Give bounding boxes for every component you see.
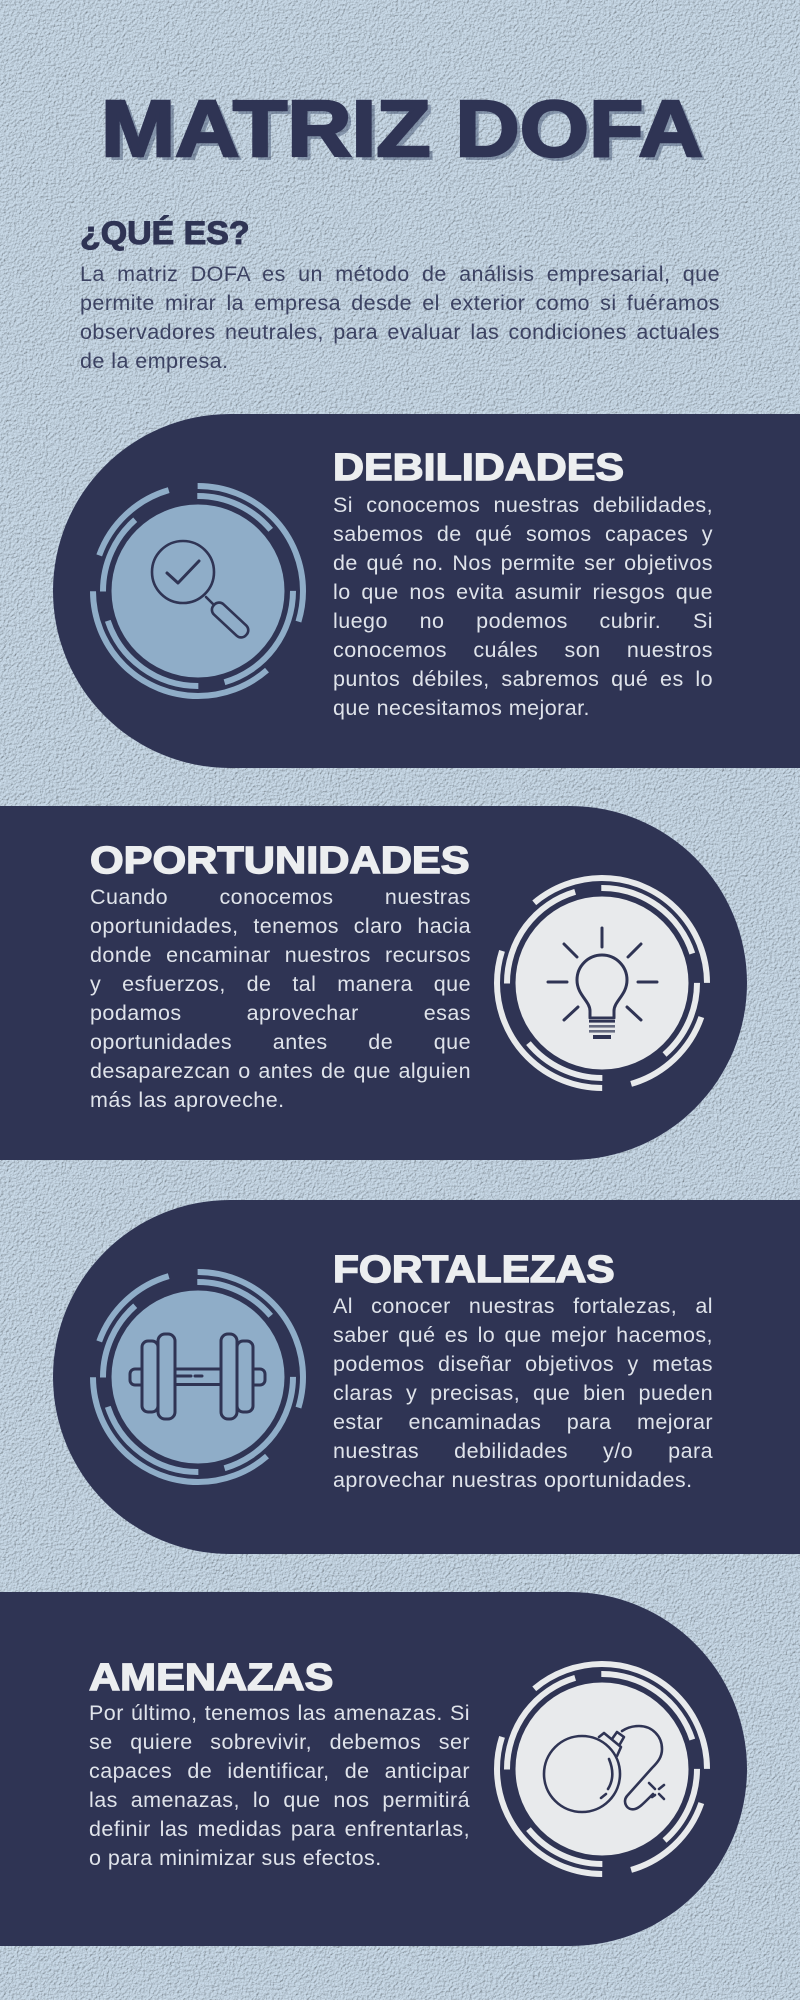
body text: oportunidades: desaparezcan o antes de que alguien xyxy=(90,1059,471,1083)
body text: amenazas: las amenazas, lo que nos permitirá xyxy=(89,1788,470,1812)
body text: debilidades: luego no podemos cubrir. Si xyxy=(333,609,713,633)
heading: fortalezas: FORTALEZAS xyxy=(333,1249,615,1291)
body text: oportunidades: y esfuerzos, de tal manera que xyxy=(90,972,471,996)
body text: debilidades: de qué no. Nos permite ser objetivos xyxy=(333,551,713,575)
title: MATRIZ DOFA xyxy=(101,84,703,173)
body text: amenazas: definir las medidas para enfrentarlas, xyxy=(89,1817,470,1841)
body text: debilidades: lo que nos evita asumir riesgos que xyxy=(333,580,713,604)
body text: oportunidades: oportunidades, tenemos claro hacia xyxy=(90,914,471,938)
intro text: permite mirar la empresa desde el exterior como si fuéramos xyxy=(80,291,720,315)
intro text xyxy=(80,262,720,373)
body text: oportunidades: Cuando conocemos nuestras xyxy=(90,885,471,909)
body text: oportunidades: podamos aprovechar esas xyxy=(90,1001,471,1025)
body text: fortalezas: saber qué es lo que mejor hacemos, xyxy=(333,1323,713,1347)
panel: debilidades xyxy=(53,414,800,768)
body text: oportunidades: más las aproveche. xyxy=(90,1088,285,1112)
body text: oportunidades: oportunidades antes de que xyxy=(90,1030,471,1054)
icon: magnifier with check xyxy=(90,483,306,699)
panel: fortalezas xyxy=(53,1200,800,1554)
body text: amenazas xyxy=(89,1701,470,1870)
icon: bomb xyxy=(494,1661,710,1877)
body text: fortalezas: Al conocer nuestras fortalezas, al xyxy=(333,1294,713,1318)
heading: oportunidades: OPORTUNIDADES xyxy=(90,840,470,882)
panel: oportunidades xyxy=(0,806,747,1160)
body text: amenazas: se quiere sobrevivir, debemos ser xyxy=(89,1730,470,1754)
body text: debilidades: sabemos de qué somos capaces y xyxy=(333,522,713,546)
intro text: observadores neutrales, para evaluar las condiciones actuales xyxy=(80,320,720,344)
panel: amenazas xyxy=(0,1592,747,1946)
body text: fortalezas: estar encaminadas para mejorar xyxy=(333,1410,713,1434)
heading: que es: ¿QUÉ ES? xyxy=(80,215,250,251)
heading: amenazas: AMENAZAS xyxy=(89,1657,333,1699)
icon: dumbbell xyxy=(90,1269,306,1485)
body text: fortalezas: podemos diseñar objetivos y metas xyxy=(333,1352,713,1376)
body text: fortalezas: aprovechar nuestras oportunidades. xyxy=(333,1468,693,1492)
body text: amenazas: o para minimizar sus efectos. xyxy=(89,1846,382,1870)
body text: oportunidades xyxy=(90,885,471,1112)
icon: light bulb xyxy=(494,875,710,1091)
body text: debilidades xyxy=(333,493,713,720)
heading: debilidades: DEBILIDADES xyxy=(333,447,624,489)
body text: debilidades: conocemos cuáles son nuestros xyxy=(333,638,713,662)
intro text: de la empresa. xyxy=(80,349,229,373)
body text: fortalezas xyxy=(333,1294,713,1492)
body text: amenazas: capaces de identificar, de anticipar xyxy=(89,1759,470,1783)
body text: oportunidades: donde encaminar nuestros recursos xyxy=(90,943,471,967)
body text: debilidades: puntos débiles, sabremos qué es lo xyxy=(333,667,713,691)
body text: debilidades: Si conocemos nuestras debilidades, xyxy=(333,493,713,517)
body text: debilidades: que necesitamos mejorar. xyxy=(333,696,590,720)
intro text: La matriz DOFA es un método de análisis empresarial, que xyxy=(80,262,720,286)
body text: fortalezas: claras y precisas, que bien pueden xyxy=(333,1381,713,1405)
body text: fortalezas: nuestras debilidades y/o para xyxy=(333,1439,713,1463)
body text: amenazas: Por último, tenemos las amenazas. Si xyxy=(89,1701,470,1725)
